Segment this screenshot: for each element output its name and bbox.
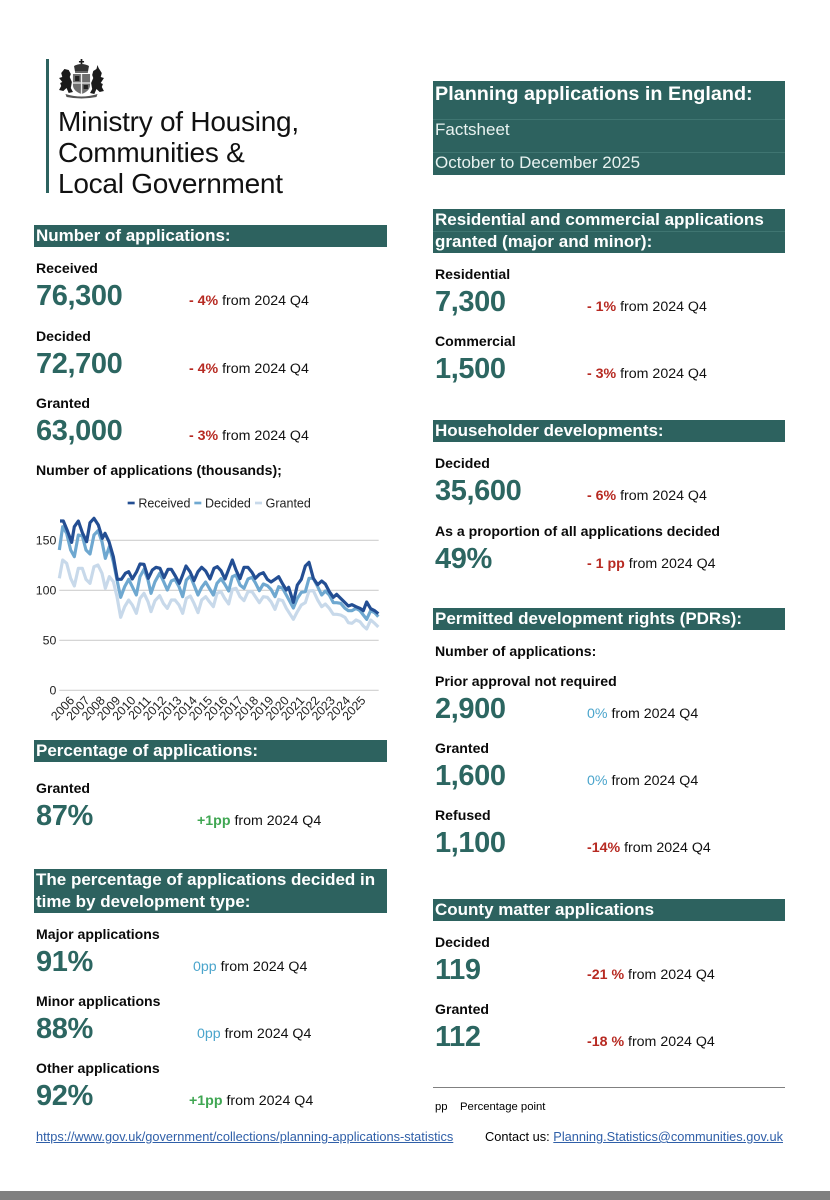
heading: number of applications: Number of applications: <box>36 226 231 245</box>
x axis year labels: 2006 <box>48 693 77 723</box>
y axis labels: 100 <box>36 584 56 598</box>
metric: county granted: -18 % from 2024 Q4 <box>587 1034 715 1050</box>
metric: percentage granted: +1pp from 2024 Q4 <box>197 813 321 829</box>
metric: major applications <box>36 926 307 978</box>
metric: householder proportion <box>435 523 720 575</box>
metric: percentage granted <box>36 780 321 832</box>
chart legend: Granted <box>266 496 311 510</box>
metric: pdr refused: 1,100 <box>435 827 506 859</box>
x axis year labels <box>48 693 369 723</box>
metric: county decided <box>435 934 715 986</box>
glossary: percentage point: Percentage point <box>460 1101 545 1113</box>
logo accent bar <box>46 59 49 193</box>
logo wordmark: Local Government <box>58 168 283 199</box>
metric: householder decided: Decided <box>435 455 490 471</box>
chart legend: Received <box>138 496 190 510</box>
glossary: percentage point: pp <box>435 1101 448 1113</box>
x axis year labels: 2014 <box>171 693 200 723</box>
x axis year labels: 2025 <box>340 693 369 723</box>
metric: householder proportion: - 1 pp from 2024 Q4 <box>587 556 716 572</box>
metric: decided: - 4% from 2024 Q4 <box>189 361 309 377</box>
x axis year labels: 2017 <box>217 693 246 723</box>
metric: residential <box>435 266 707 318</box>
x axis year labels: 2023 <box>309 693 338 723</box>
y axis labels <box>36 534 56 698</box>
metric: householder decided <box>435 455 707 507</box>
metric: minor applications <box>36 993 311 1045</box>
x axis year labels: 2012 <box>140 693 169 723</box>
metric: pdr granted: Granted <box>435 740 489 756</box>
metric: percentage granted: 87% <box>36 800 93 832</box>
heading: county matter applications: County matter applications <box>435 900 654 919</box>
metric: granted: Granted <box>36 395 90 411</box>
metric: other applications: +1pp from 2024 Q4 <box>189 1093 313 1109</box>
metric: received: Received <box>36 260 98 276</box>
metric: county granted: 112 <box>435 1021 481 1053</box>
metric: minor applications: 88% <box>36 1013 93 1045</box>
metric: pdr granted: 1,600 <box>435 760 506 792</box>
y axis labels: 50 <box>43 634 56 648</box>
chart legend <box>128 496 311 510</box>
x axis year labels: 2018 <box>232 693 261 723</box>
heading: decided in time: The percentage of applications decided in <box>36 870 375 889</box>
metric: prior approval not required: Prior approval not required <box>435 673 617 689</box>
metric: pdr refused: Refused <box>435 807 491 823</box>
metric: householder decided: 35,600 <box>435 475 521 507</box>
metric: granted: - 3% from 2024 Q4 <box>189 428 309 444</box>
y axis labels: 150 <box>36 534 56 548</box>
metric: householder proportion: 49% <box>435 543 492 575</box>
metric: decided <box>36 328 309 380</box>
heading: residential and commercial: Residential and commercial applications <box>435 210 764 229</box>
metric: other applications <box>36 1060 313 1112</box>
x axis year labels: 2008 <box>79 693 108 723</box>
line: decided <box>59 527 378 619</box>
title heading: Planning applications in England: <box>435 83 753 105</box>
label: number of applications: Number of applications: <box>435 643 596 659</box>
metric: pdr refused: -14% from 2024 Q4 <box>587 840 711 856</box>
metric: residential: 7,300 <box>435 286 506 318</box>
heading: residential and commercial: granted (major and minor): <box>435 232 652 251</box>
metric: residential: Residential <box>435 266 510 282</box>
x axis year labels: 2009 <box>94 693 123 723</box>
metric: other applications: Other applications <box>36 1060 160 1076</box>
logo wordmark: Ministry of Housing, <box>58 106 299 137</box>
title panel <box>433 81 785 175</box>
logo wordmark <box>58 106 299 199</box>
metric: commercial <box>435 333 707 385</box>
metric: received: 76,300 <box>36 280 122 312</box>
x axis year labels: 2016 <box>202 693 231 723</box>
metric: householder proportion: As a proportion of all applications decided <box>435 523 720 539</box>
heading: percentage of applications: Percentage of applications: <box>36 741 258 760</box>
metric: granted: 63,000 <box>36 415 122 447</box>
metric: received <box>36 260 309 312</box>
metric: county granted <box>435 1001 715 1053</box>
x axis year labels: 2011 <box>126 693 154 722</box>
metric: commercial: Commercial <box>435 333 516 349</box>
x axis year labels: 2013 <box>156 693 185 723</box>
heading: decided in time: time by development type: <box>36 892 250 911</box>
subtitle: period: October to December 2025 <box>435 153 640 172</box>
metric: county granted: Granted <box>435 1001 489 1017</box>
chart legend: Decided <box>205 496 251 510</box>
logo wordmark: Communities & <box>58 137 245 168</box>
footer link: statistics collection: https://www.gov.uk/government/collections/planning-applications-statistics <box>36 1129 453 1144</box>
metric: minor applications: 0pp from 2024 Q4 <box>197 1026 311 1042</box>
metric: county decided: -21 % from 2024 Q4 <box>587 967 715 983</box>
metric: county decided: 119 <box>435 954 481 986</box>
metric: granted <box>36 395 309 447</box>
metric: householder decided: - 6% from 2024 Q4 <box>587 488 707 504</box>
x axis year labels: 2010 <box>110 693 139 723</box>
line chart: applications received, decided, granted <box>36 496 380 723</box>
metric: decided: 72,700 <box>36 348 122 380</box>
x axis year labels: 2019 <box>248 693 277 723</box>
icon: royal coat of arms <box>59 59 104 98</box>
heading: county matter applications <box>433 899 785 921</box>
glossary: percentage point <box>433 1087 785 1117</box>
x axis year labels: 2022 <box>294 693 323 723</box>
metric: major applications: 91% <box>36 946 93 978</box>
line: received <box>60 518 378 614</box>
heading: householder developments: Householder developments: <box>435 421 664 440</box>
heading: householder developments <box>433 420 785 442</box>
metric: prior approval not required <box>435 673 698 725</box>
heading: decided in time <box>34 869 387 913</box>
x axis year labels: 2015 <box>186 693 215 723</box>
logo: Ministry of Housing, Communities & Local Government <box>46 59 299 199</box>
metric: commercial: - 3% from 2024 Q4 <box>587 366 707 382</box>
metric: other applications: 92% <box>36 1080 93 1112</box>
x axis year labels: 2024 <box>324 693 353 723</box>
metric: prior approval not required: 0% from 2024 Q4 <box>587 706 698 722</box>
line: granted <box>59 560 378 629</box>
heading: percentage of applications <box>34 740 387 762</box>
heading: permitted development rights: Permitted development rights (PDRs): <box>435 609 742 628</box>
metric: minor applications: Minor applications <box>36 993 161 1009</box>
metric: prior approval not required: 2,900 <box>435 693 506 725</box>
bottom grey band <box>0 1191 830 1200</box>
x axis year labels: 2020 <box>263 693 292 723</box>
chart heading: Number of applications (thousands); <box>36 462 282 478</box>
metric: county decided: Decided <box>435 934 490 950</box>
y axis labels: 0 <box>49 684 56 698</box>
metric: percentage granted: Granted <box>36 780 90 796</box>
heading: number of applications <box>34 225 387 247</box>
metric: received: - 4% from 2024 Q4 <box>189 293 309 309</box>
x axis year labels: 2021 <box>278 693 307 723</box>
metric: major applications: Major applications <box>36 926 160 942</box>
metric: commercial: 1,500 <box>435 353 506 385</box>
heading: residential and commercial <box>433 209 785 253</box>
metric: decided: Decided <box>36 328 91 344</box>
x axis year labels: 2007 <box>64 693 93 723</box>
footer: contact: Contact us: Planning.Statistics@communities.gov.uk <box>485 1129 783 1144</box>
metric: pdr refused <box>435 807 711 859</box>
subtitle: Factsheet: Factsheet <box>435 120 510 139</box>
metric: pdr granted <box>435 740 698 792</box>
metric: major applications: 0pp from 2024 Q4 <box>193 959 307 975</box>
metric: residential: - 1% from 2024 Q4 <box>587 299 707 315</box>
metric: pdr granted: 0% from 2024 Q4 <box>587 773 698 789</box>
